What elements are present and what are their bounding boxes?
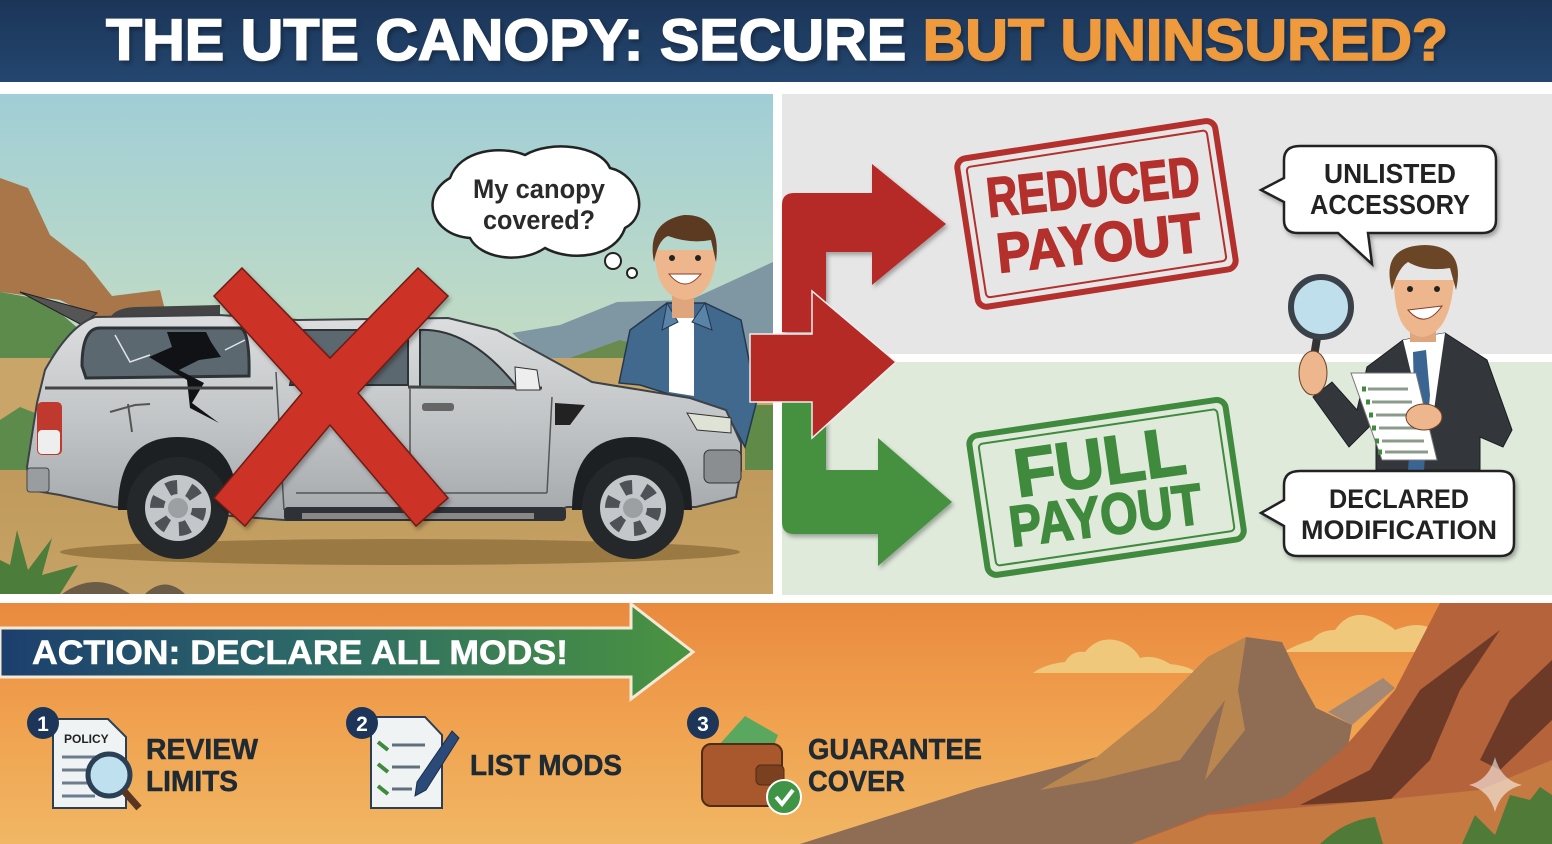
icon: sparkle watermark	[1469, 757, 1522, 812]
step 1: review limits: REVIEW	[146, 734, 259, 766]
step 1: review limits: POLICY	[64, 732, 109, 746]
arrow: green down to full payout	[782, 400, 952, 566]
thought bubble: My canopy	[473, 174, 605, 204]
stamp: reduced payout: REDUCED	[983, 144, 1203, 229]
callout: declared modification	[1261, 471, 1514, 556]
thought bubble	[433, 146, 639, 278]
step 2: list mods: 2	[356, 713, 368, 736]
action heading: ACTION: DECLARE ALL MODS!	[32, 634, 568, 672]
panel: reduced payout background	[782, 94, 1552, 354]
callout: declared modification: DECLARED	[1329, 484, 1469, 514]
thought bubble: covered?	[483, 205, 595, 235]
step 3: guarantee cover: 3	[697, 713, 709, 736]
stamp: full payout: FULL	[1009, 413, 1190, 512]
wheel: rear	[127, 457, 229, 559]
step 3: guarantee cover: COVER	[808, 766, 905, 798]
callout: unlisted accessory: UNLISTED	[1324, 158, 1456, 189]
illustration: clouds	[1033, 615, 1433, 673]
stamp: full payout	[968, 399, 1245, 576]
callout: unlisted accessory: ACCESSORY	[1310, 189, 1470, 220]
stamp: full payout: PAYOUT	[1005, 472, 1206, 560]
stamp: reduced payout: PAYOUT	[993, 201, 1205, 285]
illustration: inspector with magnifier and checklist	[1291, 245, 1512, 470]
wheel: front	[582, 457, 684, 559]
arrow: red central	[750, 291, 896, 438]
illustration: silver ute with damaged canopy	[20, 292, 741, 559]
step 1: review limits	[27, 707, 259, 808]
step 1: review limits: LIMITS	[146, 766, 238, 798]
illustration: red canyon rocks	[800, 603, 1552, 844]
step 2: list mods: LIST MODS	[470, 750, 622, 782]
step 3: guarantee cover: GUARANTEE	[808, 734, 982, 766]
panel: full payout background	[782, 362, 1552, 595]
step 2: list mods	[346, 707, 622, 808]
step 1: review limits: 1	[37, 713, 49, 736]
stamp: reduced payout	[956, 120, 1237, 308]
panel: action footer	[0, 603, 1552, 844]
panel: title banner	[0, 0, 1552, 82]
illustration: man	[619, 215, 757, 447]
step 3: guarantee cover	[687, 707, 982, 814]
arrow: action banner	[0, 604, 693, 699]
panel: ute scene	[0, 94, 773, 594]
icon: red X	[214, 268, 448, 526]
arrow: red up to reduced payout	[782, 164, 946, 332]
callout: unlisted accessory	[1261, 146, 1496, 264]
callout: declared modification: MODIFICATION	[1301, 515, 1497, 545]
title: THE UTE CANOPY: SECURE BUT UNINSURED?	[106, 8, 1448, 73]
